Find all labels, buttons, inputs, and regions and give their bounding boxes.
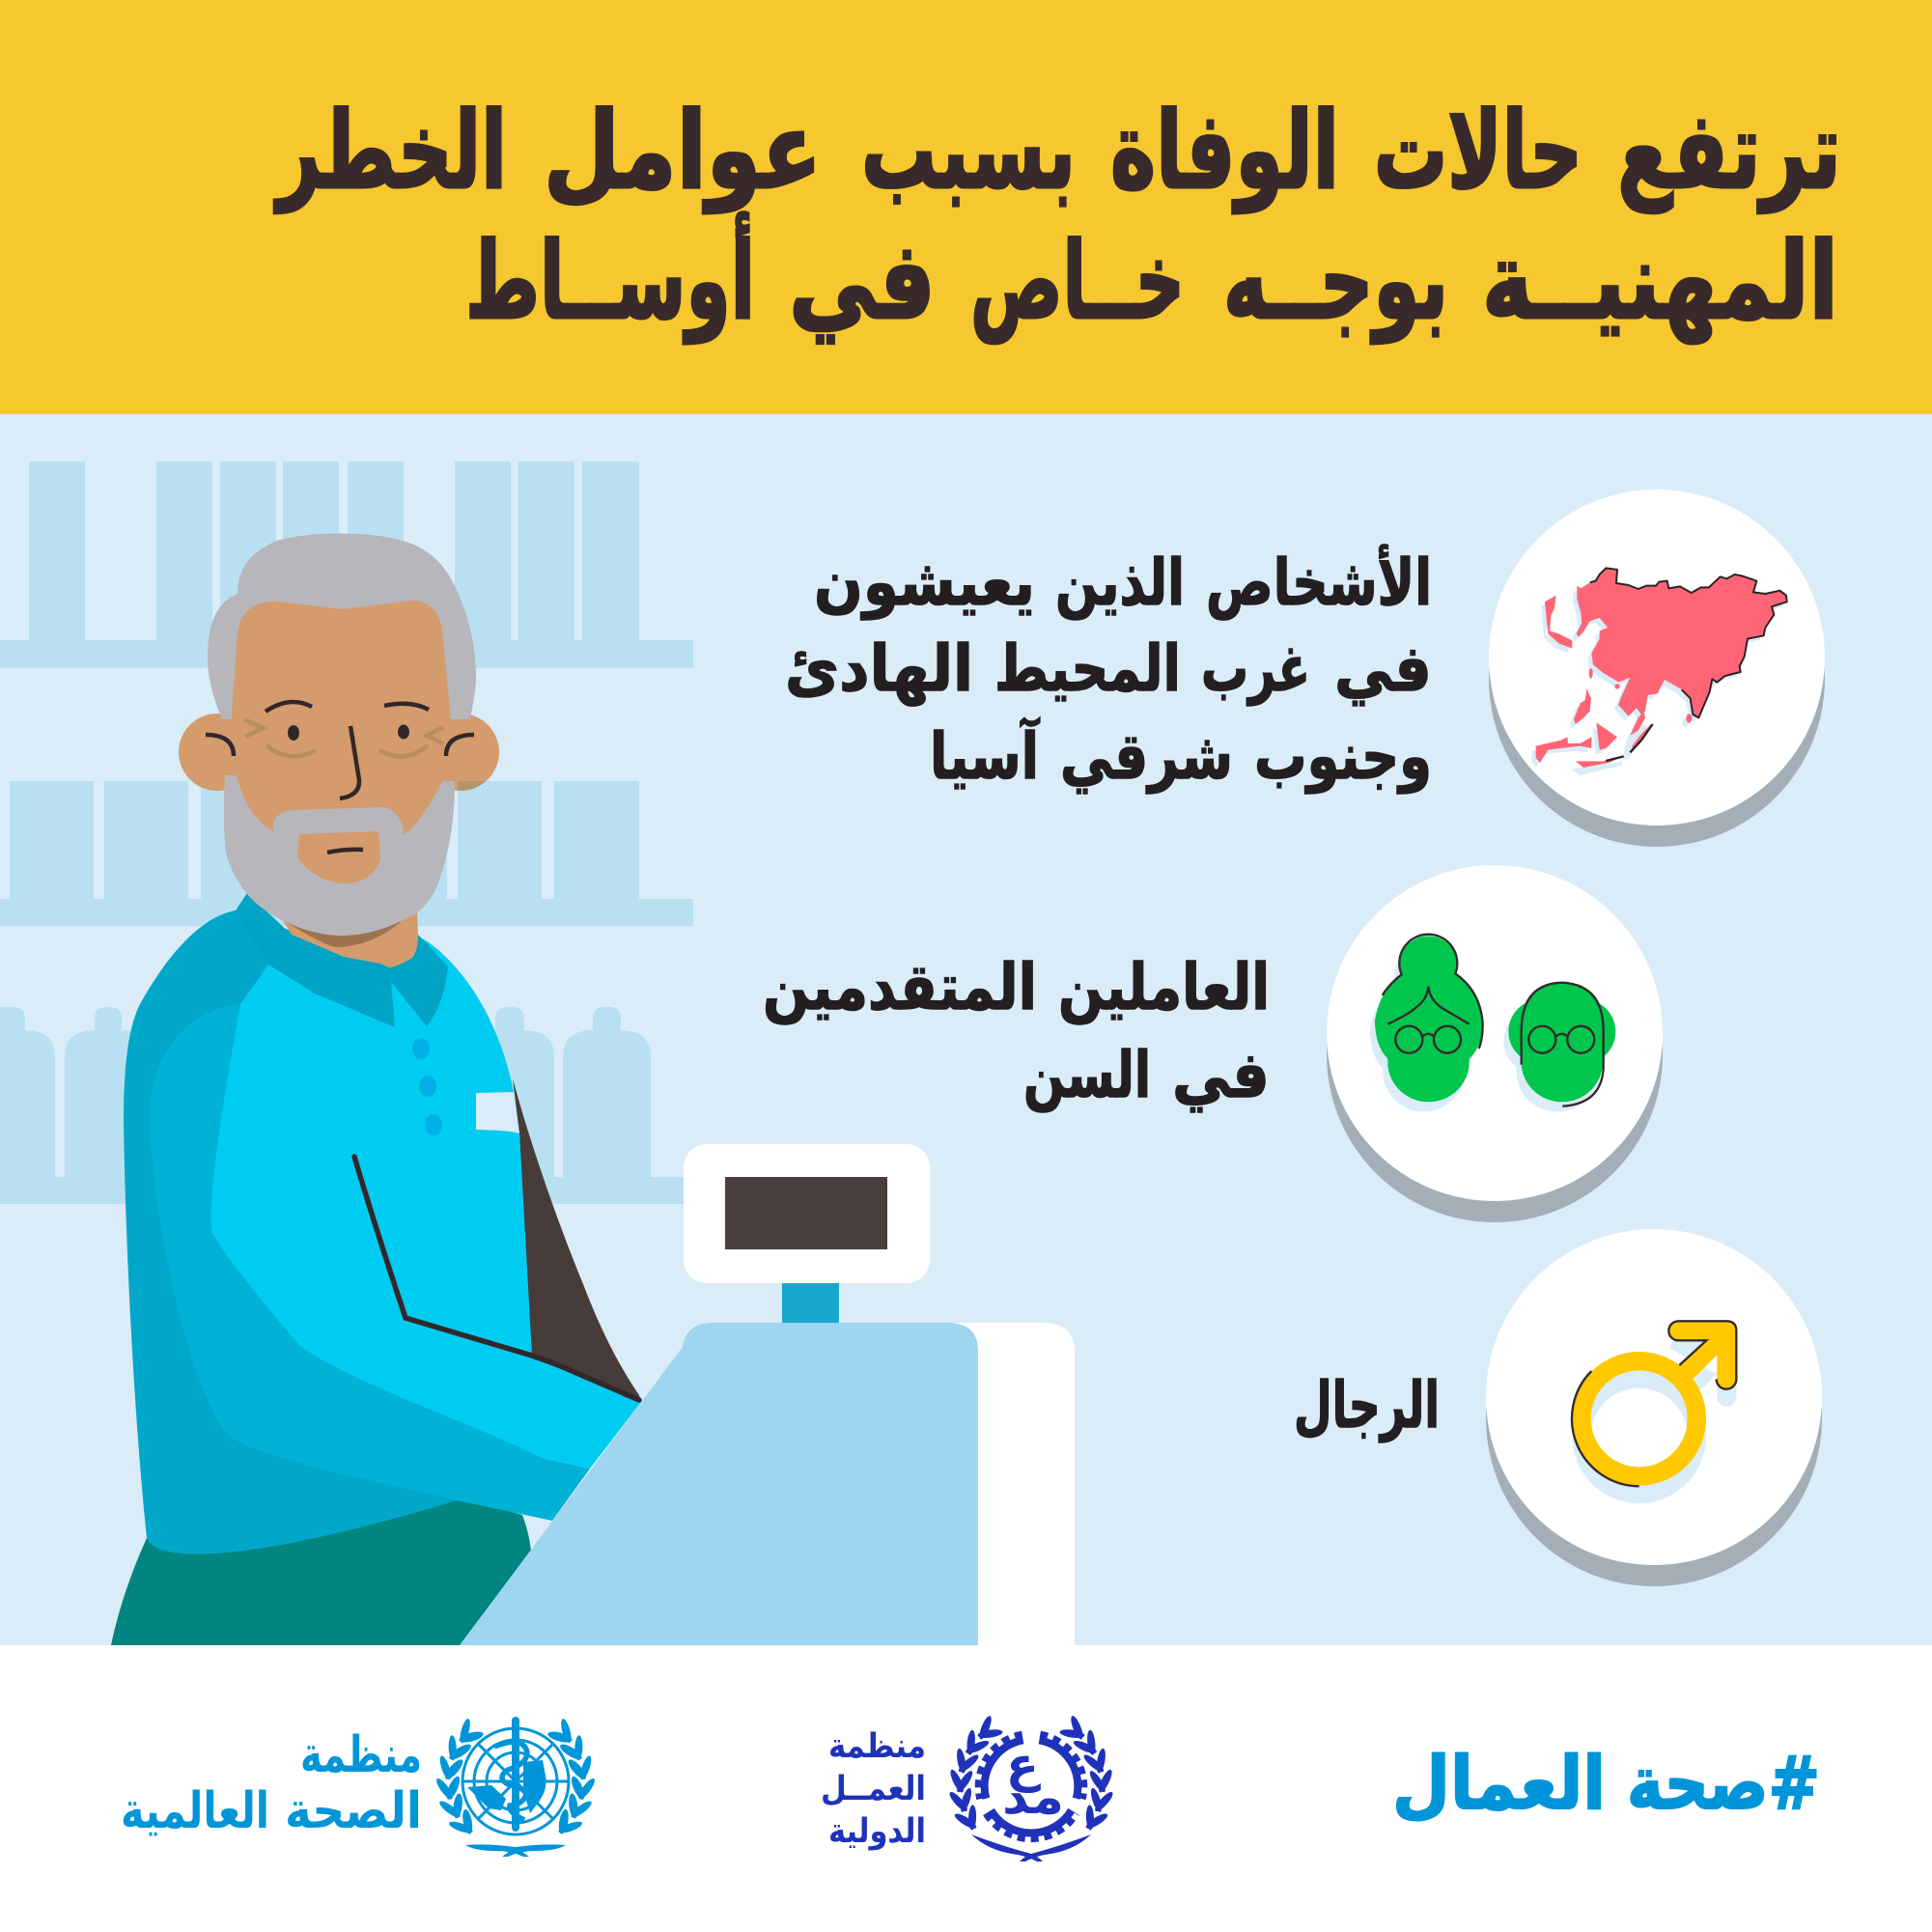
facial features [206,702,474,853]
hair [208,533,476,719]
title: ترتفع [1617,89,1841,213]
text: region: وجنوب [1254,719,1432,795]
shirt buttons [412,1038,442,1135]
WHO emblem [434,1717,597,1857]
text: age [763,950,1270,1112]
panel: region item [1489,490,1825,847]
title: أوســاط [465,212,755,344]
shelves background [0,462,693,1204]
neck shadow [278,917,401,947]
register screen housing [684,1144,930,1283]
text: region: الهادئ [785,631,973,707]
text: region [785,544,1432,795]
header band [0,0,1932,414]
eyes [288,724,409,741]
text: region: غرب [1201,631,1310,706]
text: region: الأشخاص [1206,544,1432,620]
text: region: آسيا [930,716,1040,794]
ILO name: منظمة [828,1727,926,1766]
shirt torso and forearm [210,917,641,1469]
shirt back [124,910,541,1554]
ILO monogram [1002,1737,1064,1825]
text: age: في [1172,1038,1270,1112]
cash register [460,1144,1075,1645]
WHO name: الصحة [285,1782,422,1840]
title: في [789,219,936,344]
ILO name: الدولية [828,1812,926,1851]
panel: illustration background [0,414,1932,1645]
ILO name [821,1727,926,1851]
title: المهنيــة [1482,219,1838,344]
text: region: الذين [1055,546,1185,620]
logo: WHO [121,1717,597,1857]
circle shadow [1489,511,1825,847]
icon: older woman and man [1370,935,1615,1111]
title: حالات [1374,89,1582,212]
panel: age item [1327,865,1663,1222]
wrinkles [244,719,443,756]
title: خــاص [970,219,1185,344]
title: بسبب [861,89,1076,212]
circle [1327,865,1663,1201]
hashtag: #صحة [1627,1740,1820,1826]
face [232,601,451,869]
ILO emblem [947,1715,1115,1862]
circle shadow [1327,886,1663,1222]
ILO name: العمــل [821,1770,926,1808]
text: men: الرجال [1294,1368,1440,1442]
counter back [927,1323,1075,1645]
title: الخطر [273,89,507,213]
text: age: المتقدمين [763,950,1037,1024]
chin [297,831,380,883]
text: region: المحيط [994,631,1181,706]
WHO name: العالمية [121,1782,269,1840]
text: region: يعيشون [814,546,1035,621]
text: region: شرقي [1060,719,1233,794]
title [273,89,1841,344]
name tag [476,1092,519,1134]
apron [513,1078,641,1402]
beard [224,775,455,936]
panel: men item [1486,1229,1822,1586]
title: بوجــه [1223,219,1448,344]
counter front [460,1323,978,1645]
arm outline [354,1157,639,1400]
circle [1489,490,1825,826]
neck [283,910,418,968]
shirt sleeve [150,1004,590,1521]
cashier figure [111,533,641,1645]
trousers [111,1477,531,1645]
logo: ILO [821,1715,1115,1862]
hashtag [1392,1740,1820,1826]
collar [236,893,448,1027]
ILO monogram: مد [1002,1769,1064,1825]
title: الوفاة [1110,89,1339,213]
WHO name [121,1726,422,1840]
circle shadow [1486,1250,1822,1586]
ILO monogram: ع [1006,1737,1041,1793]
ears [179,714,499,791]
text: region: في [1334,631,1432,706]
register display [725,1177,887,1249]
circle [1486,1229,1822,1565]
text: age: العاملين [1058,950,1270,1024]
text: age: السن [1023,1038,1151,1112]
title: عوامل [544,89,822,213]
hashtag: العمال [1392,1740,1606,1826]
icon: male symbol [1572,1321,1736,1494]
icon: map of Asia [1532,568,1787,775]
WHO name: منظمة [300,1726,422,1784]
register stem [782,1283,839,1323]
